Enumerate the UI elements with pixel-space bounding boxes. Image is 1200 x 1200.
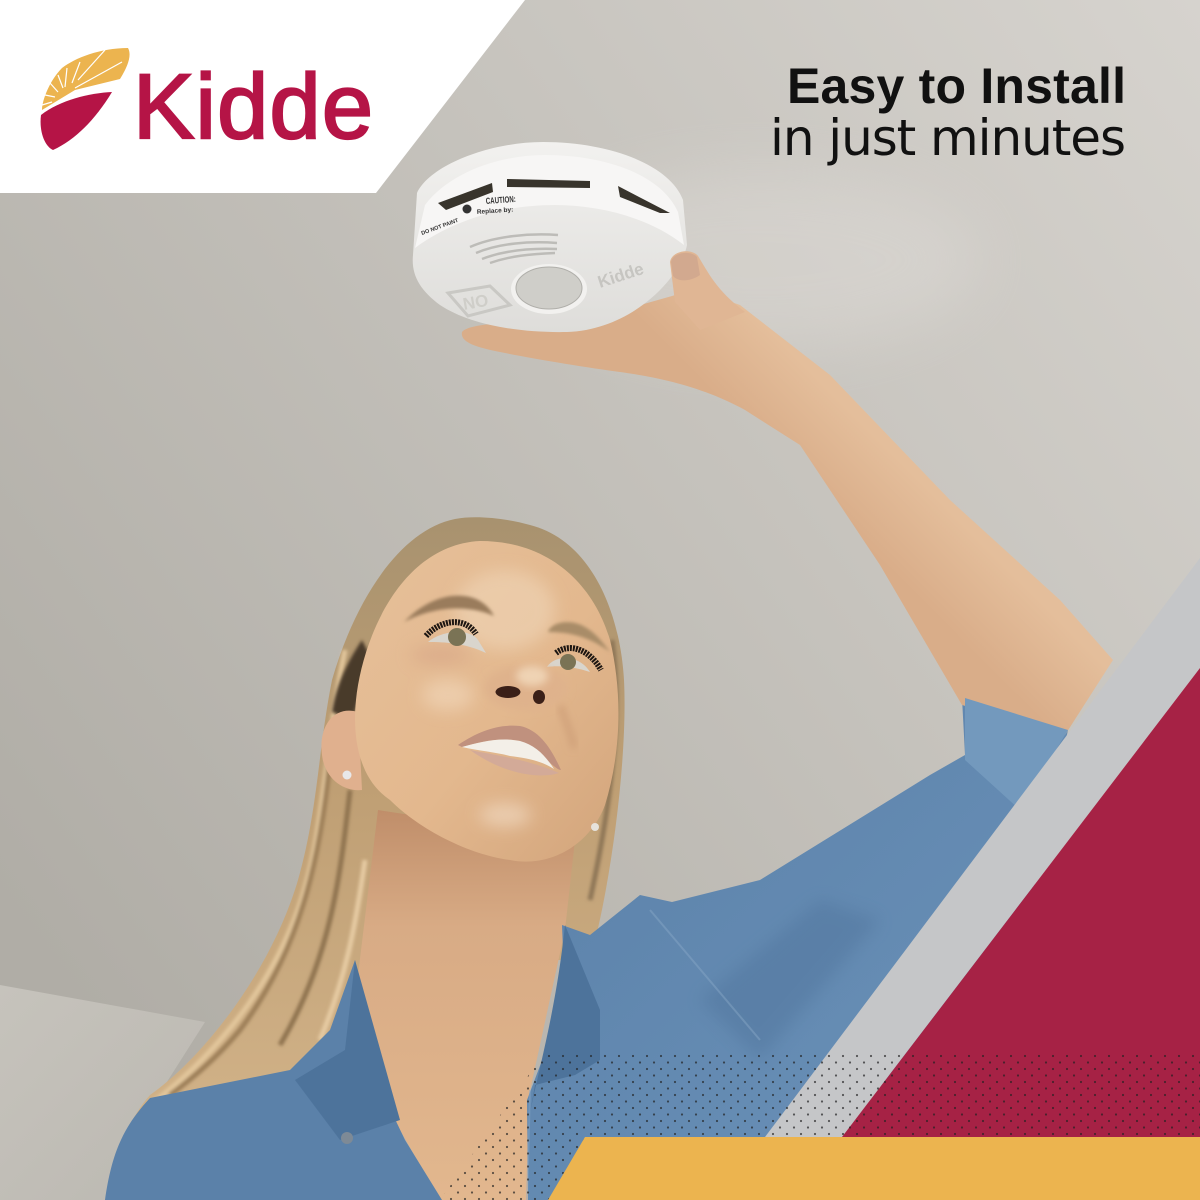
hair streaks — [150, 640, 616, 1105]
shirt folds — [700, 900, 880, 1060]
test button — [511, 264, 587, 314]
Kidde embossed logo: Kidde — [595, 259, 646, 292]
shirt button — [341, 1132, 353, 1144]
headline line 1: Easy to Install — [787, 58, 1126, 114]
teeth — [462, 740, 554, 769]
right eye — [547, 648, 601, 672]
sleeve cuff — [965, 698, 1068, 810]
shirt: left side — [105, 960, 442, 1200]
white logo corner — [0, 0, 525, 193]
hair — [108, 517, 625, 1195]
thumb — [670, 251, 745, 330]
vent slots — [438, 179, 670, 213]
left eye — [426, 622, 486, 653]
shirt: right side — [527, 698, 1068, 1200]
arm and hand — [462, 293, 1113, 735]
speaker grille — [470, 234, 558, 263]
logo swoosh: crimson — [41, 92, 112, 150]
lower lip — [470, 750, 559, 775]
face — [355, 541, 618, 862]
halftone dot band — [440, 1052, 1200, 1200]
neck and chest — [355, 810, 575, 1200]
cheek highlights — [410, 570, 555, 827]
earring — [342, 770, 352, 780]
shirt placket seam — [527, 910, 760, 1200]
logo swoosh: gold sun — [42, 48, 130, 110]
nose — [484, 666, 568, 710]
alarm top ring — [415, 155, 684, 248]
collar — [295, 925, 600, 1140]
grey diagonal band — [765, 558, 1200, 1137]
crimson triangle — [842, 668, 1200, 1137]
nasolabial fold — [560, 705, 574, 748]
NO stamp — [448, 286, 510, 316]
right eyebrow — [548, 622, 610, 652]
second earring — [591, 823, 599, 831]
Kidde logo — [41, 48, 373, 158]
alarm label text: Replace by: — [477, 206, 514, 216]
upper lip — [458, 726, 561, 770]
alarm label text — [421, 194, 516, 237]
logo wordmark: Kidde — [133, 56, 373, 158]
nostrils — [496, 686, 545, 704]
alarm label text: DO NOT PAINT — [421, 218, 460, 237]
alarm label text: CAUTION: — [485, 194, 516, 206]
left eyebrow — [404, 596, 494, 622]
headline — [770, 58, 1126, 167]
alarm body — [413, 142, 687, 332]
mouth — [458, 726, 561, 775]
gold band — [548, 1137, 1200, 1200]
thumbnail — [671, 253, 700, 280]
logo sun rays — [42, 50, 122, 105]
NO stamp: NO — [461, 291, 490, 314]
headline line 2: in just minutes — [770, 109, 1126, 167]
hair shadow — [332, 640, 372, 720]
ear — [321, 711, 362, 790]
woman — [105, 142, 1113, 1200]
smoke alarm — [413, 142, 687, 332]
